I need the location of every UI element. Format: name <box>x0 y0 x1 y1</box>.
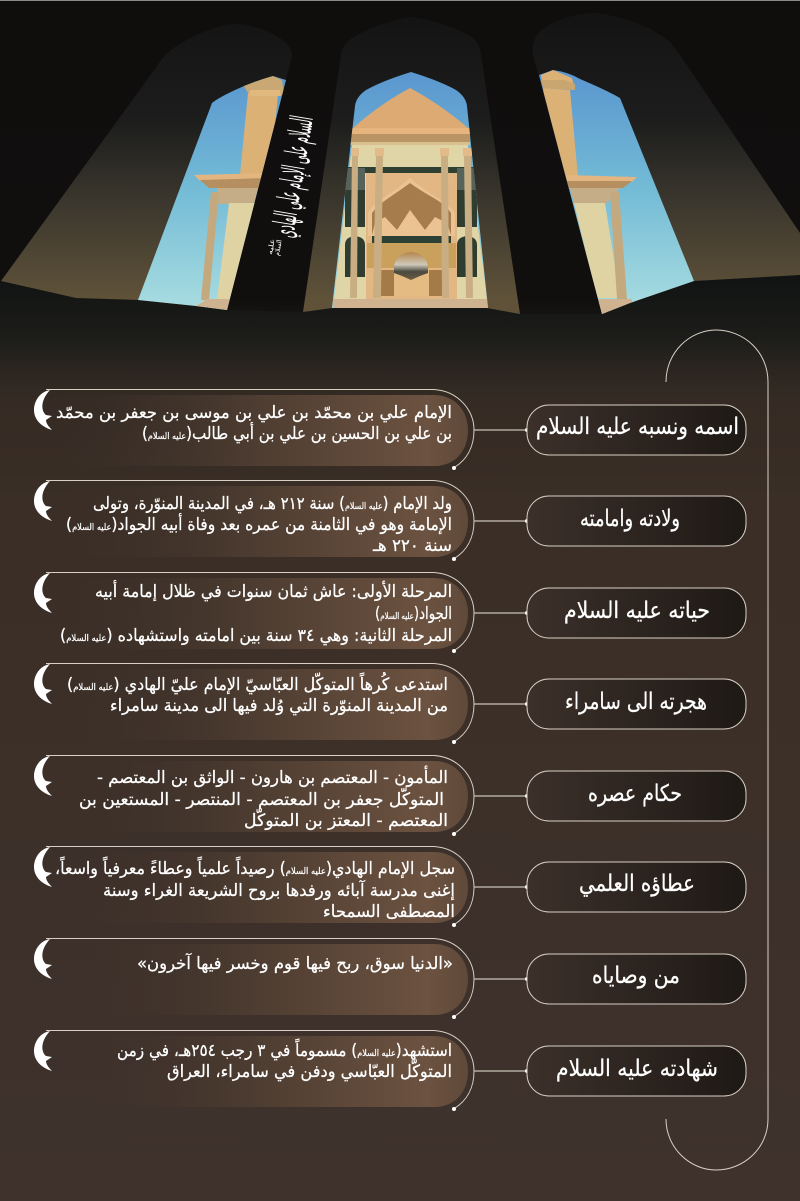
label pill <box>527 862 746 912</box>
row 1: name and lineage <box>34 390 746 470</box>
panel text: المأمون - المعتصم بن هارون - الواثق بن المعتصم - <box>97 765 448 788</box>
panel text <box>79 765 448 831</box>
row 3: his life <box>34 572 746 653</box>
panel <box>34 756 529 836</box>
label pill <box>527 771 746 821</box>
panel <box>34 846 529 927</box>
label pill <box>527 405 746 455</box>
middle window with shrine facade <box>330 70 490 310</box>
panel text: المرحلة الأولى: عاش ثمان سنوات في ظلال إمامة أبيه <box>95 580 452 602</box>
dome <box>353 88 468 128</box>
calligraphy on pillar <box>265 113 321 256</box>
panel text: من المدينة المنوّرة التي وُلد فيها الى مدينة سامراء <box>110 696 448 716</box>
right arch <box>533 13 800 314</box>
row 4: migration to Samarra <box>34 664 746 744</box>
middle arch <box>303 17 520 314</box>
panel text: المتوكّل جعفر بن المعتصم - المنتصر - المستعين بن <box>79 787 444 810</box>
calligraphy on pillar: عليه <box>266 238 277 255</box>
panel text: الجواد(عليه السلام) <box>375 604 452 624</box>
panel <box>34 572 529 653</box>
panel text <box>55 855 455 922</box>
panel text: المعتصم - المعتز بن المتوكّل <box>244 808 448 831</box>
scene: shrine seen through three arches <box>1 35 800 314</box>
panel text <box>56 403 452 444</box>
panel text <box>67 671 448 716</box>
panel text: ولد الإمام (عليه السلام) سنة ٢١٢ هـ، في المدينة المنوّرة، وتولى <box>93 494 452 514</box>
row 7: his counsel <box>34 938 746 1019</box>
panel text: الإمام علي بن محمّد بن علي بن موسى بن جعفر بن محمّد <box>56 403 452 423</box>
calligraphy on pillar: السلام <box>273 239 284 256</box>
panel <box>34 480 529 561</box>
shrine door ornament <box>394 252 428 280</box>
label pill: شهادته عليه السلام <box>556 1056 718 1082</box>
label pill: هجرته الى سامراء <box>565 689 707 715</box>
row 8: his martyrdom <box>34 1030 746 1111</box>
label pill <box>527 1046 746 1096</box>
panel text: استدعى كُرهاً المتوكّل العبّاسيّ الإمام عليّ الهادي (عليه السلام) <box>67 671 448 695</box>
panel <box>34 390 529 470</box>
panel text <box>60 580 452 646</box>
panel text: بن علي بن الحسين بن علي بن أبي طالب(عليه السلام) <box>142 422 452 444</box>
panel <box>34 664 529 744</box>
ground <box>0 275 800 372</box>
panel text: استشهد(عليه السلام) مسموماً في ٣ رجب ٢٥٤هـ، في زمن <box>117 1037 452 1061</box>
label pill <box>527 496 746 546</box>
panel <box>34 1030 529 1111</box>
label pill: ولادته وامامته <box>580 506 680 532</box>
label pill: حياته عليه السلام <box>564 598 710 624</box>
label pill: عطاؤه العلمي <box>579 871 695 897</box>
panel text <box>117 1037 452 1082</box>
panel text: الإمامة وهو في الثامنة من عمره بعد وفاة أبيه الجواد(عليه السلام) <box>66 513 452 535</box>
label pill <box>527 588 746 638</box>
left arch <box>1 24 292 310</box>
row 2: birth and imamate <box>34 480 746 561</box>
panel text: سجل الإمام الهادي(عليه السلام) رصيداً علمياً وعطاءً معرفياً واسعاً، <box>55 855 455 879</box>
panel text: المرحلة الثانية: وهي ٣٤ سنة بين امامته واستشهاده (عليه السلام) <box>60 626 452 646</box>
panel text: إغنى مدرسة آبائه ورفدها بروح الشريعة الغراء وسنة <box>103 879 455 901</box>
panel text: المتوكّل العبّاسي ودفن في سامراء، العراق <box>167 1059 452 1082</box>
panel <box>34 938 529 1019</box>
panel text <box>66 494 452 556</box>
row 6: scholarly legacy <box>34 846 746 927</box>
label pill <box>527 954 746 1004</box>
panel text: المصطفى السمحاء <box>323 902 455 922</box>
left window with minaret <box>138 76 286 310</box>
panel text: «الدنيا سوق، ربح فيها قوم وخسر فيها آخرون» <box>137 952 453 974</box>
row 5: rulers of his era <box>34 756 746 836</box>
label pill: من وصاياه <box>592 963 680 989</box>
panel text: سنة ٢٢٠ هـ <box>372 536 452 556</box>
label pill: اسمه ونسبه عليه السلام <box>536 414 739 440</box>
outer bracket line <box>666 330 768 1170</box>
right window with minaret <box>539 70 694 314</box>
label pill: حكام عصره <box>588 781 682 807</box>
label pill <box>527 679 746 729</box>
